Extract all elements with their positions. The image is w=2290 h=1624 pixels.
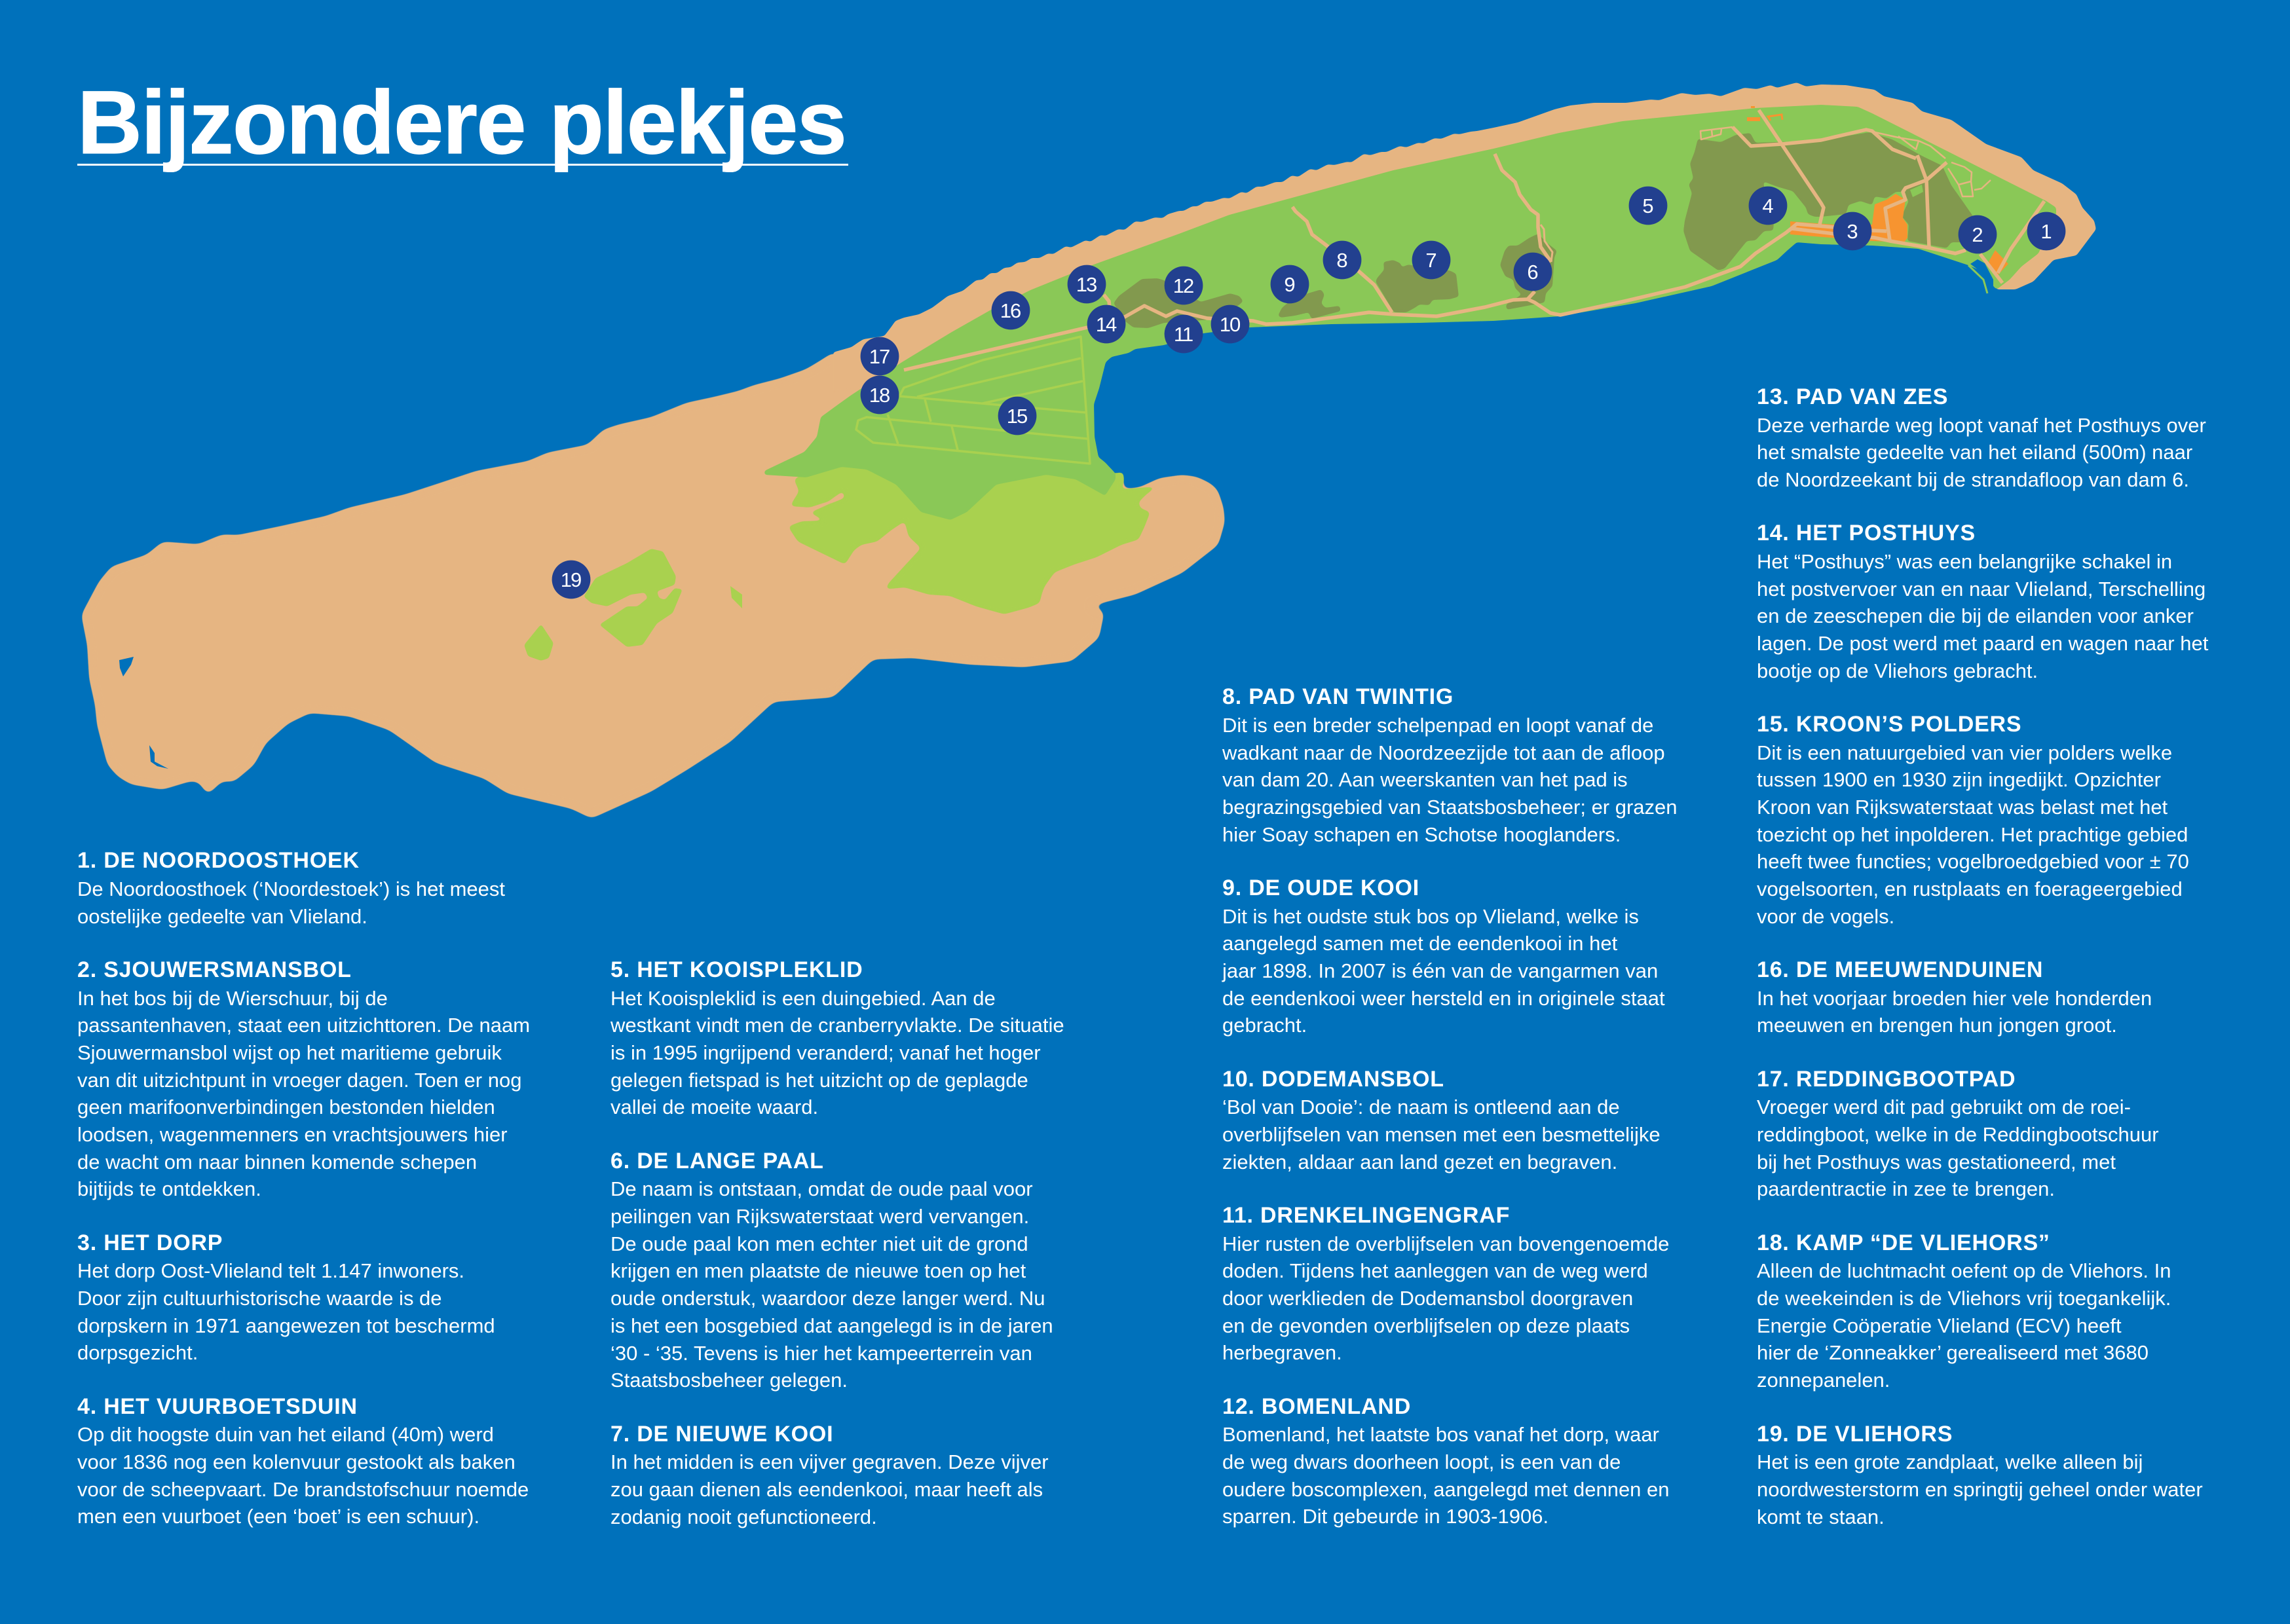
marker 8: 8	[1336, 249, 1348, 272]
text 3: dorpsgezicht.	[77, 1341, 198, 1364]
section 2	[77, 957, 530, 1200]
marker 1: 1	[2040, 220, 2052, 243]
text 9	[1222, 905, 1665, 1037]
text 5: Het Kooispleklid is een duingebied. Aan de	[610, 987, 996, 1010]
text 9: jaar 1898. In 2007 is één van de vangarmen van	[1222, 959, 1658, 982]
text 17: bij het Posthuys was gestationeerd, met	[1757, 1151, 2116, 1173]
inlet: western pool	[119, 657, 134, 676]
text 5: is in 1995 ingrijpend veranderd; vanaf het hoger	[610, 1041, 1041, 1064]
text 15: voor de vogels.	[1757, 905, 1894, 928]
text 9: de eendenkooi weer hersteld en in originele staat	[1222, 987, 1665, 1010]
text 18: zonnepanelen.	[1757, 1369, 1890, 1392]
marker 6	[1514, 253, 1552, 291]
text 4: voor de scheepvaart. De brandstofschuur noemde	[77, 1478, 529, 1501]
text 8: begrazingsgebied van Staatsbosbeheer; er grazen	[1222, 796, 1678, 819]
text 5: westkant vindt men de cranberryvlakte. De situatie	[610, 1014, 1064, 1037]
text 3: Door zijn cultuurhistorische waarde is de	[77, 1287, 442, 1310]
marker 2	[1959, 215, 1997, 253]
text 18: hier de ‘Zonneakker’ gerealiseerd met 3680	[1757, 1341, 2149, 1364]
text 4	[77, 1423, 529, 1528]
text 13	[1757, 414, 2206, 491]
section 6	[610, 1149, 1053, 1392]
heading 3: 3. HET DORP	[77, 1230, 223, 1255]
section 18	[1757, 1230, 2171, 1394]
text 2: de wacht om naar binnen komende schepen	[77, 1151, 477, 1173]
text 2: In het bos bij de Wierschuur, bij de	[77, 987, 388, 1010]
text 11: en de gevonden overblijfselen op deze plaats	[1222, 1314, 1630, 1337]
text 7: zodanig nooit gefunctioneerd.	[610, 1505, 877, 1528]
text 6: De naam is ontstaan, omdat de oude paal voor	[610, 1177, 1033, 1200]
text 5	[610, 987, 1064, 1118]
heading 13: 13. PAD VAN ZES	[1757, 384, 1948, 409]
land: Vliehors sand plain	[81, 352, 1225, 819]
marina basin	[1970, 259, 1993, 288]
text 4: voor 1836 nog een kolenvuur gestookt als baken	[77, 1450, 516, 1473]
section 13	[1757, 384, 2206, 491]
text 17: paardentractie in zee te brengen.	[1757, 1177, 2055, 1200]
heading 18: 18. KAMP “DE VLIEHORS”	[1757, 1230, 2050, 1255]
text 3: dorpskern in 1971 aangewezen tot beschermd	[77, 1314, 495, 1337]
marina jetty	[1968, 265, 1987, 293]
text 15: toezicht op het inpolderen. Het prachtige gebied	[1757, 823, 2188, 846]
marker 11: 11	[1174, 323, 1193, 346]
text 18: Energie Coöperatie Vlieland (ECV) heeft	[1757, 1314, 2122, 1337]
marker 7	[1412, 241, 1450, 279]
text 14: het postvervoer van en naar Vlieland, Terschelling	[1757, 578, 2206, 600]
text 12: Bomenland, het laatste bos vanaf het dorp, waar	[1222, 1423, 1659, 1446]
text 13: de Noordzeekant bij de strandafloop van dam 6.	[1757, 468, 2189, 491]
text 6: oude onderstuk, waardoor deze langer werd. Nu	[610, 1287, 1045, 1310]
text 10: overblijfselen van mensen met een besmettelijke	[1222, 1123, 1661, 1146]
section 4	[77, 1394, 529, 1528]
marker 5	[1629, 187, 1667, 225]
text 1	[77, 877, 505, 928]
text 18	[1757, 1257, 2171, 1394]
heading 17: 17. REDDINGBOOTPAD	[1757, 1067, 2016, 1092]
heading 5: 5. HET KOOISPLEKLID	[610, 957, 863, 982]
text 14: bootje op de Vliehors gebracht.	[1757, 659, 2038, 682]
text 19	[1757, 1449, 2203, 1530]
marker 11	[1165, 315, 1203, 353]
text 16: meeuwen en brengen hun jongen groot.	[1757, 1014, 2117, 1037]
marker 19	[552, 561, 590, 599]
text 11	[1222, 1232, 1669, 1364]
text 9: aangelegd samen met de eendenkooi in het	[1222, 932, 1617, 955]
heading 11: 11. DRENKELINGENGRAF	[1222, 1203, 1510, 1228]
marker 18	[861, 376, 899, 414]
marker 10	[1211, 305, 1249, 343]
section 9	[1222, 876, 1665, 1037]
marker 9: 9	[1284, 273, 1296, 296]
text 6: is het een bosgebied dat aangelegd is in de jaren	[610, 1314, 1053, 1337]
text 1: De Noordoosthoek (‘Noordestoek’) is het meest	[77, 877, 505, 900]
heading 9: 9. DE OUDE KOOI	[1222, 876, 1419, 900]
section 15	[1757, 712, 2189, 928]
marker 15	[998, 397, 1036, 435]
text 8	[1222, 714, 1678, 846]
heading 8: 8. PAD VAN TWINTIG	[1222, 684, 1454, 709]
text 18: Alleen de luchtmacht oefent op de Vliehors. In	[1757, 1259, 2171, 1282]
orange built-up areas	[1747, 106, 2008, 275]
marker 7: 7	[1425, 249, 1437, 272]
section 16	[1757, 957, 2152, 1037]
heading 1: 1. DE NOORDOOSTHOEK	[77, 848, 360, 873]
text 15	[1757, 741, 2189, 928]
light green patches on the Vliehors	[524, 549, 742, 661]
text 17	[1757, 1094, 2159, 1203]
section 19	[1757, 1421, 2203, 1530]
section 17	[1757, 1066, 2159, 1203]
marker 8	[1323, 241, 1361, 279]
text 8: wadkant naar de Noordzeezijde tot aan de afloop	[1222, 741, 1665, 764]
text 1: oostelijke gedeelte van Vlieland.	[77, 905, 367, 928]
text 15: heeft twee functies; vogelbroedgebied voor ± 70	[1757, 850, 2189, 873]
section 14	[1757, 521, 2209, 682]
text 19: noordwesterstorm en springtij geheel onder water	[1757, 1478, 2203, 1501]
text 19: Het is een grote zandplaat, welke alleen bij	[1757, 1450, 2143, 1473]
heading 10: 10. DODEMANSBOL	[1222, 1067, 1444, 1092]
text 6: ‘30 - ‘35. Tevens is hier het kampeerterrein van	[610, 1341, 1032, 1365]
text 11: doden. Tijdens het aanleggen van de weg werd	[1222, 1259, 1648, 1282]
marker 10: 10	[1220, 313, 1241, 336]
text 5: gelegen fietspad is het uitzicht op de geplagde	[610, 1069, 1028, 1092]
forest clearing	[1910, 185, 1923, 197]
marker 16	[992, 291, 1030, 329]
text 12: de weg dwars doorheen loopt, is een van de	[1222, 1450, 1621, 1473]
marker 19: 19	[561, 568, 581, 591]
text 14: lagen. De post werd met paard en wagen naar het	[1757, 632, 2208, 655]
marker 5: 5	[1642, 194, 1654, 217]
marker 6: 6	[1527, 261, 1539, 284]
text 13: het smalste gedeelte van het eiland (500m) naar	[1757, 441, 2192, 464]
text 13: Deze verharde weg loopt vanaf het Posthuys over	[1757, 414, 2206, 437]
text 6: De oude paal kon men echter niet uit de grond	[610, 1232, 1028, 1255]
text 10: ‘Bol van Dooie’: de naam is ontleend aan de	[1222, 1096, 1620, 1118]
heading 4: 4. HET VUURBOETSDUIN	[77, 1394, 358, 1419]
text 10	[1222, 1096, 1661, 1173]
marker 14	[1087, 305, 1125, 343]
text 18: de weekeinden is de Vliehors vrij toegankelijk.	[1757, 1287, 2171, 1310]
text 16: In het voorjaar broeden hier vele honderden	[1757, 987, 2152, 1010]
text 6: krijgen en men plaatste de nieuwe toen op het	[610, 1259, 1026, 1282]
text 12: oudere boscomplexen, aangelegd met dennen en	[1222, 1478, 1670, 1501]
marker 14: 14	[1096, 313, 1117, 336]
marker 1	[2027, 212, 2065, 250]
text 11: herbegraven.	[1222, 1341, 1342, 1364]
text 7	[610, 1450, 1049, 1528]
marker 13	[1068, 265, 1106, 303]
text 6	[610, 1177, 1053, 1392]
text 4: Op dit hoogste duin van het eiland (40m) werd	[77, 1423, 494, 1446]
land: northern beach and eastern sand	[833, 83, 2096, 393]
marker 12	[1165, 267, 1203, 304]
section 7	[610, 1421, 1049, 1528]
inlet: south-western pool	[149, 745, 168, 769]
marker 17	[861, 337, 899, 375]
text 2: Sjouwermansbol wijst op het maritieme gebruik	[77, 1041, 502, 1064]
text 10: ziekten, aldaar aan land gezet en begraven.	[1222, 1151, 1617, 1173]
text 7: zou gaan dienen als eendenkooi, maar heeft als	[610, 1478, 1043, 1501]
marker 12: 12	[1173, 274, 1193, 297]
marker 2: 2	[1972, 223, 1983, 246]
text 17: reddingboot, welke in de Reddingbootschuur	[1757, 1123, 2159, 1146]
marker 9	[1271, 265, 1309, 303]
text 15: Dit is een natuurgebied van vier polders welke	[1757, 741, 2172, 764]
title underline	[77, 164, 848, 166]
heading 14: 14. HET POSTHUYS	[1757, 521, 1976, 545]
heading 7: 7. DE NIEUWE KOOI	[610, 1421, 833, 1446]
text 6: peilingen van Rijkswaterstaat werd vervangen.	[610, 1205, 1029, 1228]
text 14: Het “Posthuys” was een belangrijke schakel in	[1757, 550, 2172, 573]
text 2: loodsen, wagenmenners en vrachtsjouwers hier	[77, 1123, 508, 1146]
marker 15: 15	[1007, 405, 1027, 428]
text 15: Kroon van Rijkswaterstaat was belast met het	[1757, 796, 2168, 819]
text 9: gebracht.	[1222, 1014, 1307, 1037]
text 15: tussen 1900 en 1930 zijn ingedijkt. Opzichter	[1757, 768, 2161, 791]
section 3	[77, 1230, 495, 1364]
marker 16: 16	[1000, 299, 1021, 322]
text 9: Dit is het oudste stuk bos op Vlieland, welke is	[1222, 905, 1639, 928]
forests	[1114, 132, 1974, 328]
polder dykes	[856, 337, 1090, 464]
text 11: door werklieden de Dodemansbol doorgraven	[1222, 1287, 1633, 1310]
section 12	[1222, 1394, 1670, 1528]
text 14: en de zeeschepen die bij de eilanden voor anker	[1757, 604, 2194, 627]
thin paths	[1700, 127, 1991, 196]
heading 12: 12. BOMENLAND	[1222, 1394, 1411, 1419]
text 8: hier Soay schapen en Schotse hooglanders.	[1222, 823, 1621, 846]
section 5	[610, 957, 1064, 1118]
text 6: Staatsbosbeheer gelegen.	[610, 1369, 848, 1392]
light green salt marsh	[788, 452, 1157, 614]
main paths	[904, 110, 2044, 370]
text 5: vallei de moeite waard.	[610, 1096, 818, 1118]
text 12: sparren. Dit gebeurde in 1903-1906.	[1222, 1505, 1549, 1528]
text 8: Dit is een breder schelpenpad en loopt vanaf de	[1222, 714, 1653, 737]
title: Bijzondere plekjes	[77, 73, 846, 173]
heading 19: 19. DE VLIEHORS	[1757, 1421, 1953, 1446]
text 3	[77, 1259, 495, 1364]
text 2: bijtijds te ontdekken.	[77, 1177, 261, 1200]
text 4: men een vuurboet (een ‘boet’ is een schuur).	[77, 1505, 479, 1528]
marker 13: 13	[1076, 273, 1097, 296]
text 3: Het dorp Oost-Vlieland telt 1.147 inwoners.	[77, 1259, 464, 1282]
green dune and polder land	[764, 105, 2056, 520]
heading 6: 6. DE LANGE PAAL	[610, 1149, 824, 1173]
marker 18: 18	[869, 384, 890, 407]
section 11	[1222, 1203, 1669, 1364]
text 19: komt te staan.	[1757, 1505, 1885, 1528]
marker 3: 3	[1847, 220, 1858, 243]
text 7: In het midden is een vijver gegraven. Deze vijver	[610, 1450, 1049, 1473]
marker 3	[1833, 212, 1871, 250]
text 16	[1757, 985, 2152, 1039]
text 12	[1222, 1423, 1670, 1528]
heading 16: 16. DE MEEUWENDUINEN	[1757, 957, 2043, 982]
section 1	[77, 848, 505, 928]
section 8	[1222, 684, 1678, 846]
text 8: van dam 20. Aan weerskanten van het pad is	[1222, 768, 1628, 791]
section 10	[1222, 1067, 1661, 1173]
text 2: geen marifoonverbindingen bestonden hielden	[77, 1096, 495, 1118]
text 15: vogelsoorten, en rustplaats en foerageergebied	[1757, 877, 2183, 900]
text 2: van dit uitzichtpunt in vroeger dagen. Toen er nog	[77, 1069, 521, 1092]
text 14	[1757, 550, 2209, 682]
numbered location markers	[552, 187, 2065, 599]
marker 17: 17	[869, 345, 890, 368]
text 2: passantenhaven, staat een uitzichttoren. De naam	[77, 1014, 530, 1037]
heading 15: 15. KROON’S POLDERS	[1757, 712, 2021, 737]
text 17: Vroeger werd dit pad gebruikt om de roei-	[1757, 1096, 2131, 1118]
text 2	[77, 987, 530, 1200]
marker 4	[1749, 187, 1787, 225]
marker 4: 4	[1762, 194, 1774, 217]
text 11: Hier rusten de overblijfselen van bovengenoemde	[1222, 1232, 1669, 1255]
heading 2: 2. SJOUWERSMANSBOL	[77, 957, 352, 982]
